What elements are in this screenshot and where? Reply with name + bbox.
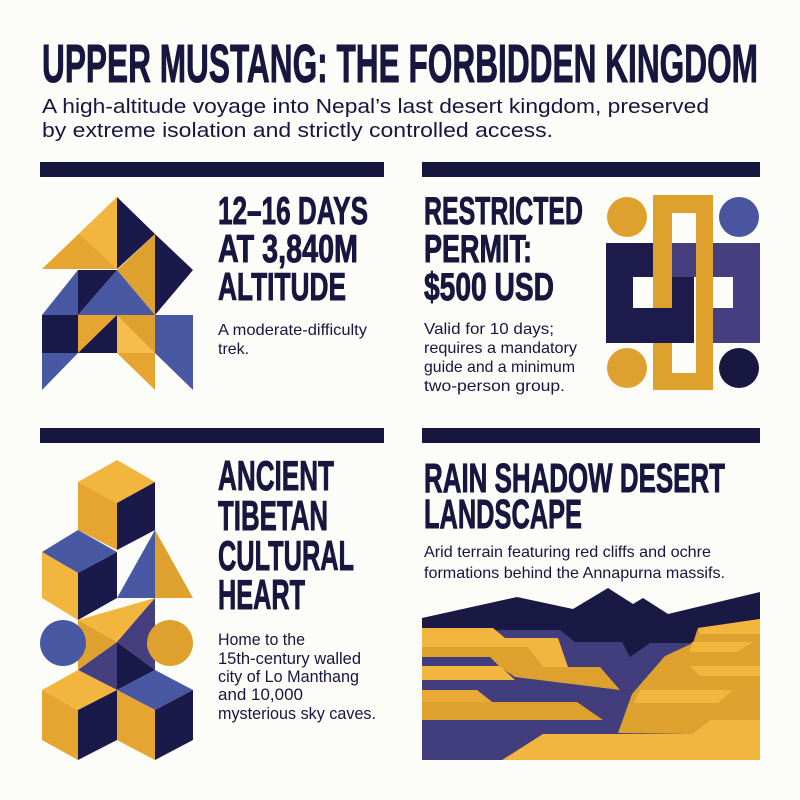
- body text: and 10,000: [218, 686, 303, 704]
- icon: endless knot: [606, 195, 760, 390]
- body text: [424, 544, 725, 582]
- subtitle: A high-altitude voyage into Nepal’s last desert kingdom, preserved: [42, 96, 709, 118]
- heading: HEART: [218, 571, 305, 618]
- body text: guide and a minimum: [424, 359, 575, 376]
- body text: Arid terrain featuring red cliffs and ochre: [424, 544, 711, 561]
- heading: ALTITUDE: [218, 266, 346, 309]
- panel: tibetan culture: [40, 452, 376, 760]
- heading: [424, 190, 583, 309]
- heading: AT 3,840M: [218, 228, 358, 271]
- body text: [218, 631, 376, 723]
- body text: trek.: [218, 341, 249, 358]
- body text: requires a mandatory: [424, 340, 577, 357]
- heading: PERMIT:: [424, 228, 532, 271]
- body text: Home to the: [218, 631, 305, 649]
- panel: desert landscape: [422, 455, 760, 760]
- body text: 15th-century walled: [218, 650, 361, 668]
- body text: [218, 322, 367, 358]
- body text: formations behind the Annapurna massifs.: [424, 565, 725, 582]
- body text: Valid for 10 days;: [424, 321, 554, 338]
- body text: two-person group.: [424, 378, 565, 395]
- heading: RESTRICTED: [424, 190, 583, 233]
- panel: duration and altitude: [42, 190, 368, 390]
- body text: A moderate-difficulty: [218, 322, 367, 339]
- heading: [218, 452, 354, 618]
- heading: $500 USD: [424, 266, 554, 309]
- heading: [424, 455, 725, 537]
- heading: TIBETAN: [218, 492, 328, 539]
- heading: ANCIENT: [218, 452, 334, 499]
- heading: LANDSCAPE: [424, 491, 582, 537]
- panel: permit: [424, 190, 760, 395]
- heading: CULTURAL: [218, 532, 354, 579]
- body text: city of Lo Manthang: [218, 668, 359, 686]
- subtitle: by extreme isolation and strictly controlled access.: [42, 120, 553, 142]
- subtitle: [42, 96, 709, 142]
- icon: stacked cubes: [40, 460, 193, 760]
- icon: geometric mountain: [42, 197, 193, 390]
- body text: [424, 321, 577, 395]
- heading: 12–16 DAYS: [218, 190, 368, 233]
- heading: [218, 190, 368, 309]
- body text: mysterious sky caves.: [218, 705, 376, 723]
- illustration: layered cliffs: [422, 588, 760, 760]
